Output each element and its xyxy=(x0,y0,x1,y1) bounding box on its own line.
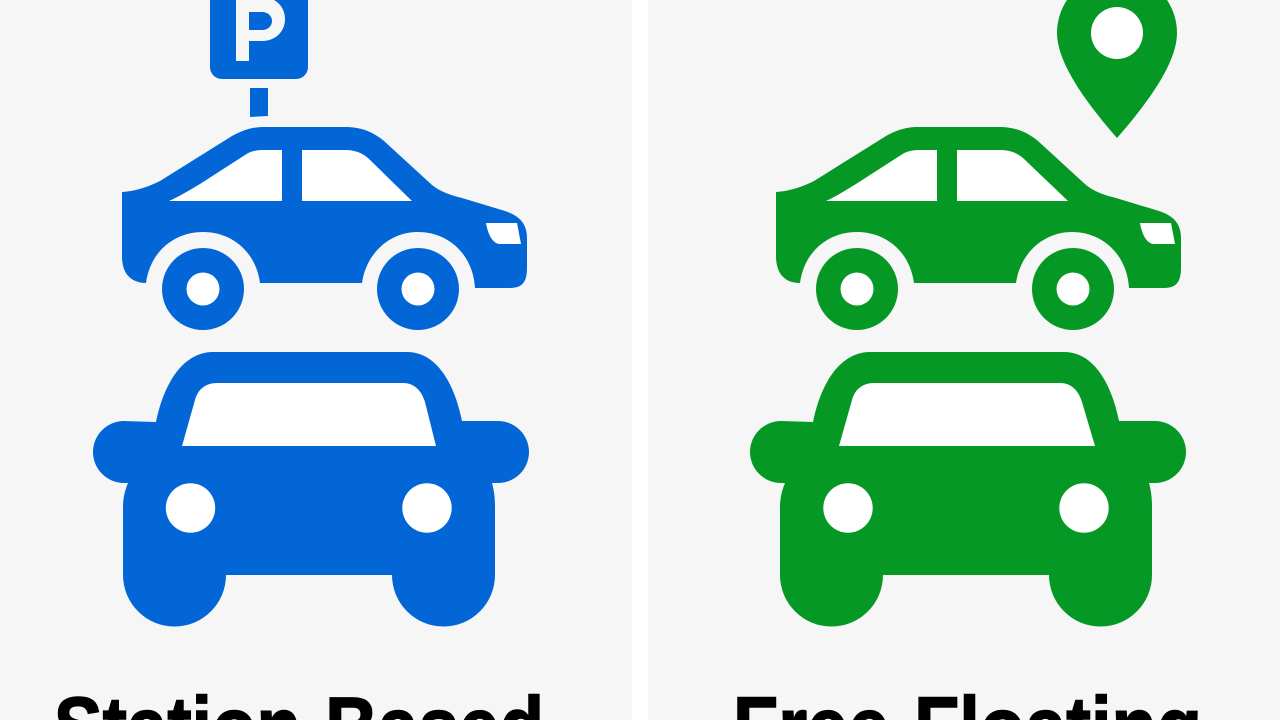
icon: green car side view xyxy=(776,127,1181,330)
icon: location pin xyxy=(1057,0,1177,138)
icon: blue car side view xyxy=(122,127,527,330)
icon: parking sign xyxy=(210,0,308,117)
icon: green car front view xyxy=(750,352,1186,626)
panel: free-floating background xyxy=(648,0,1280,720)
panel: station-based background xyxy=(0,0,632,720)
icon: blue car front view xyxy=(93,352,529,626)
